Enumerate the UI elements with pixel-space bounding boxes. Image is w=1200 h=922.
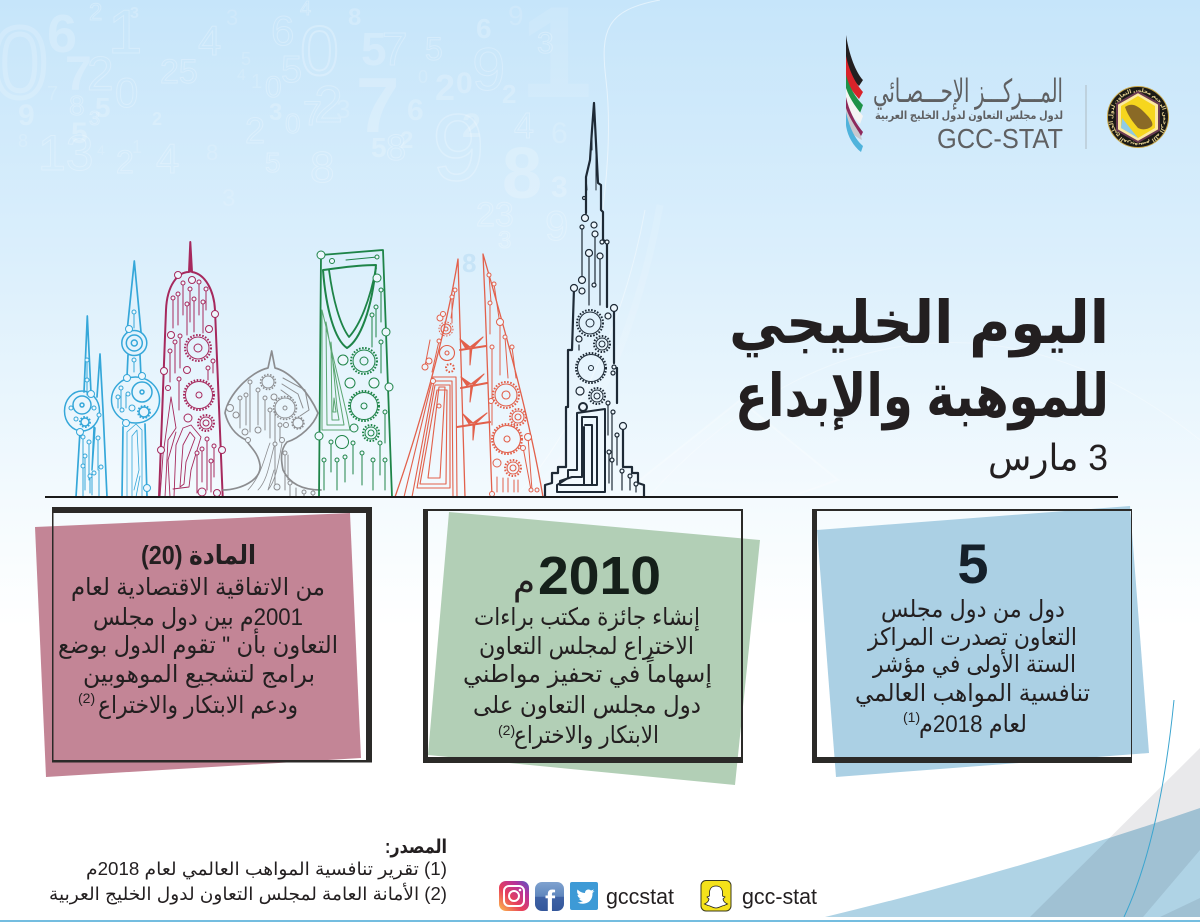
background numbers pattern: 7 [47, 83, 58, 105]
background numbers pattern: 2 [435, 67, 455, 108]
icon: twitter [570, 882, 598, 910]
panel: five GCC countries: لعام 2018م [919, 711, 1027, 738]
panel: article 20: ودعم الابتكار والاختراع [98, 692, 298, 719]
panel: article 20: من الاتفاقية الاقتصادية لعام [71, 574, 325, 601]
background numbers pattern: 4 [97, 142, 105, 158]
background numbers pattern: 2 [502, 79, 516, 109]
background numbers pattern: 8 [502, 134, 542, 214]
background numbers pattern: 9 [545, 202, 568, 249]
background numbers pattern: 6 [476, 13, 492, 44]
background numbers pattern: 9 [508, 0, 524, 31]
background numbers pattern: 7 [356, 61, 399, 149]
icon: facebook: f [545, 885, 556, 918]
skyline: Riyadh Kingdom Centre [315, 250, 393, 497]
background numbers pattern: 13 [38, 125, 94, 181]
panel: 2010 patents office: دول مجلس التعاون على [473, 692, 701, 719]
panel: 2010 patents office: إسهاماً في تحفيز مواطني [463, 657, 712, 689]
background numbers pattern: 8 [18, 131, 28, 151]
panel: 2010 patents office: الاختراع لمجلس التعاون [479, 633, 694, 660]
background numbers pattern: 2 [462, 107, 481, 145]
panel: five GCC countries: 5 [957, 532, 989, 595]
background numbers pattern: 6 [407, 94, 424, 127]
title [729, 290, 1109, 479]
panel: 2010 patents office: إنشاء جائزة مكتب براءات [474, 604, 700, 632]
background numbers pattern: 0 [418, 67, 428, 87]
background numbers pattern: 9 [18, 99, 35, 132]
panel: five GCC countries: تنافسية المواهب العالمي [855, 680, 1090, 707]
skyline: Burj Khalifa [545, 103, 644, 497]
background numbers pattern: 3 [130, 5, 139, 22]
background numbers pattern: 7 [382, 23, 408, 75]
background numbers pattern: 1 [251, 71, 262, 93]
background numbers pattern: 2 [400, 127, 413, 154]
background numbers pattern: 8 [206, 140, 218, 165]
title: اليوم الخليجي [729, 290, 1109, 358]
panel: article 20: برامج لتشجيع الموهوبين [83, 661, 315, 688]
title: للموهبة والإبداع [735, 363, 1109, 431]
source notes: (1) تقرير تنافسية المواهب العالمي لعام 2018م [86, 859, 447, 880]
background numbers pattern: 3 [222, 185, 235, 212]
background numbers pattern: 3 [226, 5, 238, 30]
background numbers pattern: 5 [95, 92, 111, 123]
background numbers pattern: 5 [425, 31, 443, 67]
logo text: statistical centre: المـــركـــز الإحـــصـائي [873, 73, 1063, 110]
panel: article 20 [35, 507, 372, 777]
logo divider [1086, 85, 1087, 149]
background numbers pattern: 6 [271, 7, 294, 54]
background numbers pattern: 2 [314, 76, 343, 134]
background numbers pattern: 3 [537, 27, 554, 60]
background numbers pattern: 5 [241, 49, 251, 69]
panel: five GCC countries: دول من دول مجلس [881, 596, 1065, 623]
background numbers pattern: 9 [472, 36, 505, 103]
icon: facebook [535, 882, 564, 918]
background numbers pattern: 2 [245, 110, 265, 151]
background numbers pattern: 8 [462, 248, 476, 278]
background numbers pattern: 3 [498, 227, 511, 254]
background numbers pattern: 0 [115, 69, 138, 116]
icon: instagram [499, 881, 529, 911]
background numbers pattern: 0 [265, 71, 282, 104]
background numbers pattern: 1 [108, 0, 142, 67]
background numbers pattern: 5 [265, 147, 281, 178]
panel: article 20: المادة (20) [141, 540, 256, 570]
background numbers pattern: 8 [386, 127, 406, 168]
background numbers pattern: 4 [237, 67, 246, 84]
background numbers pattern: 4 [156, 135, 179, 182]
background numbers pattern: 2 [87, 48, 114, 101]
logo: GCC-Stat ribbon [846, 35, 863, 152]
background numbers pattern: 9 [432, 95, 485, 201]
logo text: statistical centre: GCC-STAT [937, 123, 1063, 154]
background numbers pattern: 3 [269, 99, 282, 126]
skyline: Qatar tower [158, 242, 226, 497]
panel: article 20: 2001م بين دول مجلس [93, 604, 303, 631]
panel: 2010 patents office: (2) [498, 722, 515, 738]
background numbers pattern [0, 0, 592, 278]
corner shapes bottom right [0, 700, 1200, 922]
panel: 2010 patents office: الابتكار والاختراع [514, 722, 659, 749]
background numbers pattern: 2 [116, 144, 134, 180]
background numbers pattern: 2 [152, 109, 162, 129]
background numbers pattern: 5 [71, 117, 88, 150]
panel: five GCC countries: الستة الأولى في مؤشر [872, 649, 1076, 678]
logo text: statistical centre: لدول مجلس التعاون لدول الخليج العربية [875, 110, 1063, 122]
icon: snapchat [701, 880, 731, 911]
background numbers pattern: 8 [348, 4, 361, 31]
skyline ground line [45, 496, 1118, 498]
background numbers pattern: 8 [310, 143, 334, 192]
background numbers pattern: 25 [160, 53, 198, 91]
background wave lines [520, 0, 1200, 497]
skyline: Kuwait towers left [64, 316, 107, 497]
panel: five GCC countries [812, 506, 1149, 777]
source notes [49, 837, 447, 905]
background numbers pattern: 0 [300, 12, 339, 90]
background numbers pattern: 0 [285, 108, 301, 139]
social handle: gccstat: gccstat [606, 884, 674, 909]
background numbers pattern: 3 [89, 108, 100, 130]
source notes: (2) الأمانة العامة لمجلس التعاون لدول الخليج العربية [49, 883, 447, 905]
panel: 2010 patents office [423, 509, 760, 785]
panel: article 20: التعاون بأن " تقوم الدول بوضع [58, 628, 338, 659]
skyline: Bahrain World Trade Center [395, 254, 543, 497]
icon: GCC emblem: بسم الله الرحمن الرحيم مجلس التعاون لدول الخليج العربية [1108, 88, 1166, 146]
skyline: Oman dome [223, 351, 321, 497]
background numbers pattern: 5 [281, 49, 302, 91]
background numbers pattern: 5 [361, 23, 387, 75]
background numbers pattern: 4 [514, 105, 534, 146]
background numbers pattern: 23 [476, 196, 514, 234]
background numbers pattern: 1 [132, 137, 142, 157]
background numbers pattern: 3 [551, 171, 568, 204]
background numbers pattern: 8 [69, 90, 85, 121]
panel: five GCC countries: التعاون تصدرت المراكز [867, 624, 1077, 651]
background numbers pattern: 5 [371, 132, 387, 163]
background numbers pattern: 6 [551, 117, 568, 150]
background numbers pattern: 0 [456, 67, 473, 100]
background numbers pattern: 7 [65, 48, 92, 101]
panel: article 20: (2) [78, 690, 95, 706]
social handle: gcc-stat: gcc-stat [742, 884, 817, 909]
background numbers pattern: 4 [198, 17, 221, 64]
source notes: المصدر: [385, 837, 447, 858]
background numbers pattern: 3 [336, 94, 350, 124]
skyline: Kuwait towers right [112, 261, 160, 497]
panel: 2010 patents office: 2010 [538, 546, 661, 606]
panel: five GCC countries: (1) [903, 709, 920, 725]
background numbers pattern: 6 [47, 4, 77, 64]
logo text: statistical centre [873, 73, 1063, 154]
title: 3 مارس [988, 437, 1108, 479]
panel: 2010 patents office: م [513, 561, 535, 603]
background numbers pattern: 7 [303, 95, 322, 133]
